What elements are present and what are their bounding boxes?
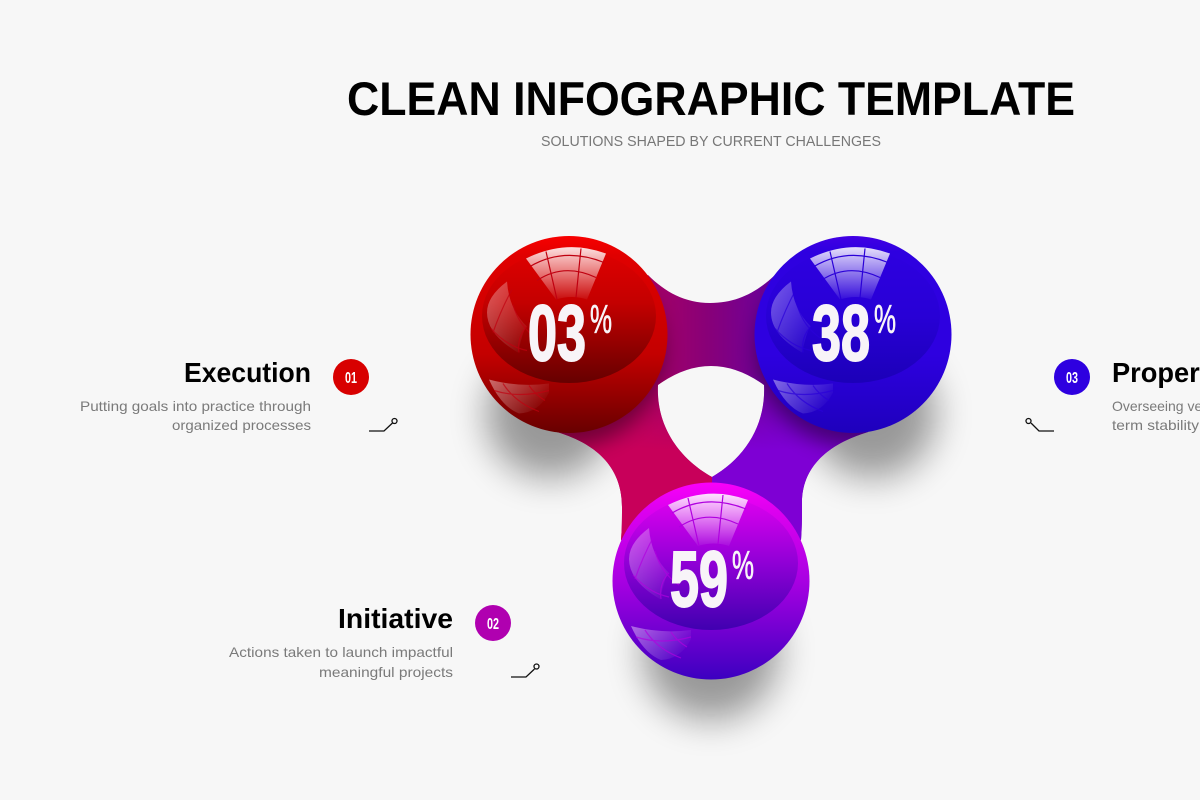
icon: circuit line 03 (1026, 418, 1054, 431)
description: initiative: Actions taken to launch impactful (229, 644, 453, 660)
description: property: term stability (1112, 417, 1199, 433)
description: property (1112, 398, 1200, 433)
sphere: magenta 59% (612, 482, 810, 680)
sphere: blue 38% (754, 236, 952, 433)
sphere: red 03%: 03 (528, 288, 586, 377)
description: execution: organized processes (172, 417, 311, 433)
icon: circuit line 01 (369, 418, 397, 431)
number badge 01 (333, 359, 369, 395)
sphere: blue 38%: % (874, 298, 896, 342)
title: CLEAN INFOGRAPHIC TEMPLATE (347, 72, 1075, 125)
heading: initiative: Initiative (338, 603, 453, 634)
sphere: red 03%: % (590, 298, 612, 342)
description: execution: Putting goals into practice through (80, 398, 311, 414)
description: initiative (229, 644, 453, 680)
panel: execution (80, 357, 397, 433)
description: property: Overseeing ve (1112, 398, 1200, 414)
number badge 02: 02 (487, 616, 499, 633)
subtitle: SOLUTIONS SHAPED BY CURRENT CHALLENGES (541, 133, 881, 150)
description: execution (80, 398, 311, 433)
sphere: magenta 59%: % (732, 544, 754, 588)
sphere: magenta 59%: 59 (670, 534, 728, 623)
number badge 01: 01 (345, 370, 357, 387)
sphere: blue 38%: 38 (812, 288, 870, 377)
panel: property (1026, 357, 1200, 433)
panel: initiative (229, 603, 539, 680)
number badge 03: 03 (1066, 370, 1078, 387)
number badge 02 (475, 605, 511, 641)
heading: execution: Execution (184, 357, 311, 388)
sphere: red 03% (470, 236, 668, 433)
connector: three-arm gradient body with shield opening (557, 275, 868, 540)
description: initiative: meaningful projects (319, 664, 453, 680)
ground shadows under spheres (486, 350, 936, 720)
icon: circuit line 02 (511, 664, 539, 677)
number badge 03 (1054, 359, 1090, 395)
